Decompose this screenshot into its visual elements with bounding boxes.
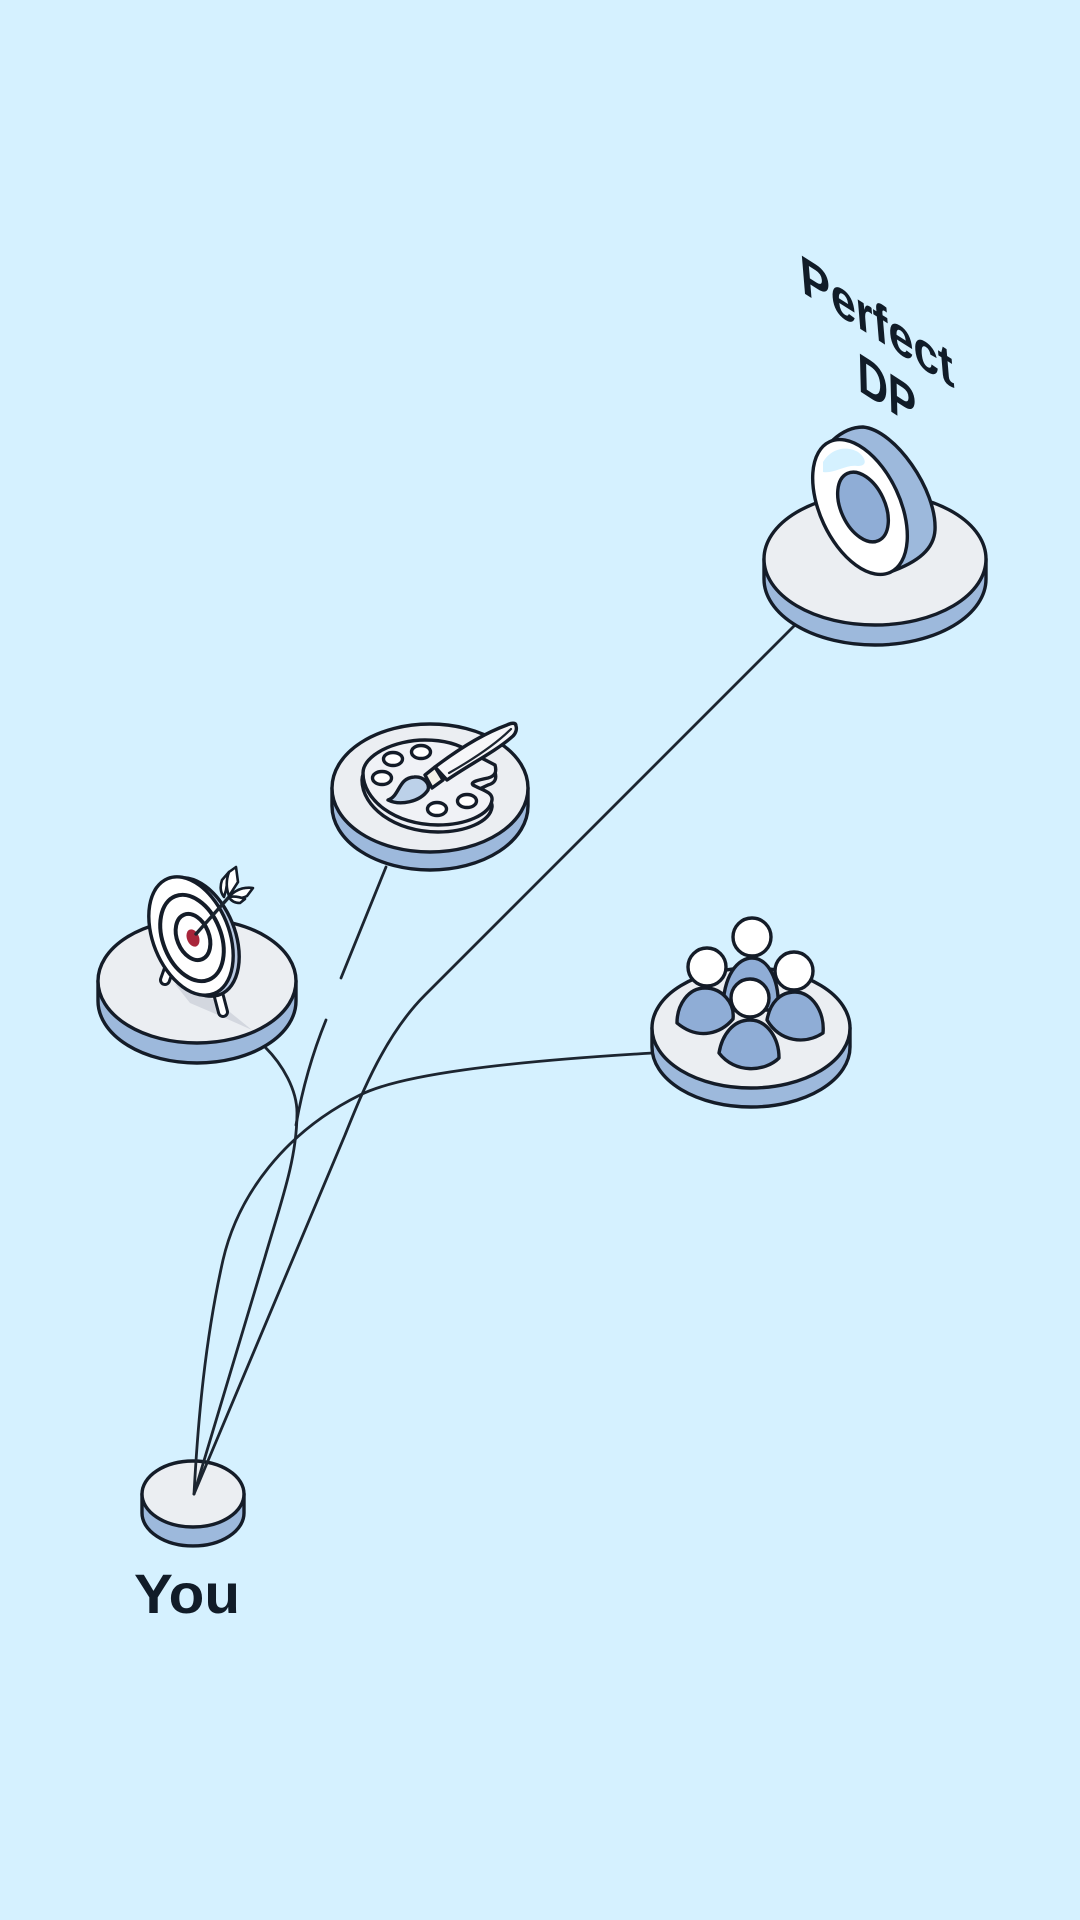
icon: group of people xyxy=(677,918,823,1069)
line: palette connector lower segment xyxy=(296,1020,326,1125)
label: You: You xyxy=(134,1562,240,1625)
icon: ring xyxy=(793,425,935,589)
platform: palette xyxy=(332,723,528,870)
line: You to target xyxy=(194,1047,297,1494)
shadow: target xyxy=(175,984,252,1030)
person: back xyxy=(723,918,778,1010)
icon: palette and brush xyxy=(362,723,516,832)
person: right xyxy=(767,952,823,1040)
person: front xyxy=(719,979,779,1069)
connector lines xyxy=(194,624,796,1494)
line: palette connector upper segment xyxy=(341,867,386,978)
line: You to community xyxy=(194,1053,653,1494)
paint wells xyxy=(372,746,476,816)
person: left xyxy=(677,948,733,1034)
platform: target xyxy=(98,864,296,1063)
platform: community xyxy=(652,918,850,1107)
platform: You xyxy=(142,1461,244,1546)
brush xyxy=(388,723,516,803)
arrow xyxy=(196,867,253,934)
line: You to Perfect DP xyxy=(194,624,796,1494)
icon: target xyxy=(133,864,255,1012)
platform: Perfect DP xyxy=(764,425,986,645)
label: Perfect DP: DP xyxy=(857,341,917,441)
label: Perfect DP: Perfect xyxy=(798,242,956,401)
target legs xyxy=(165,966,223,1012)
